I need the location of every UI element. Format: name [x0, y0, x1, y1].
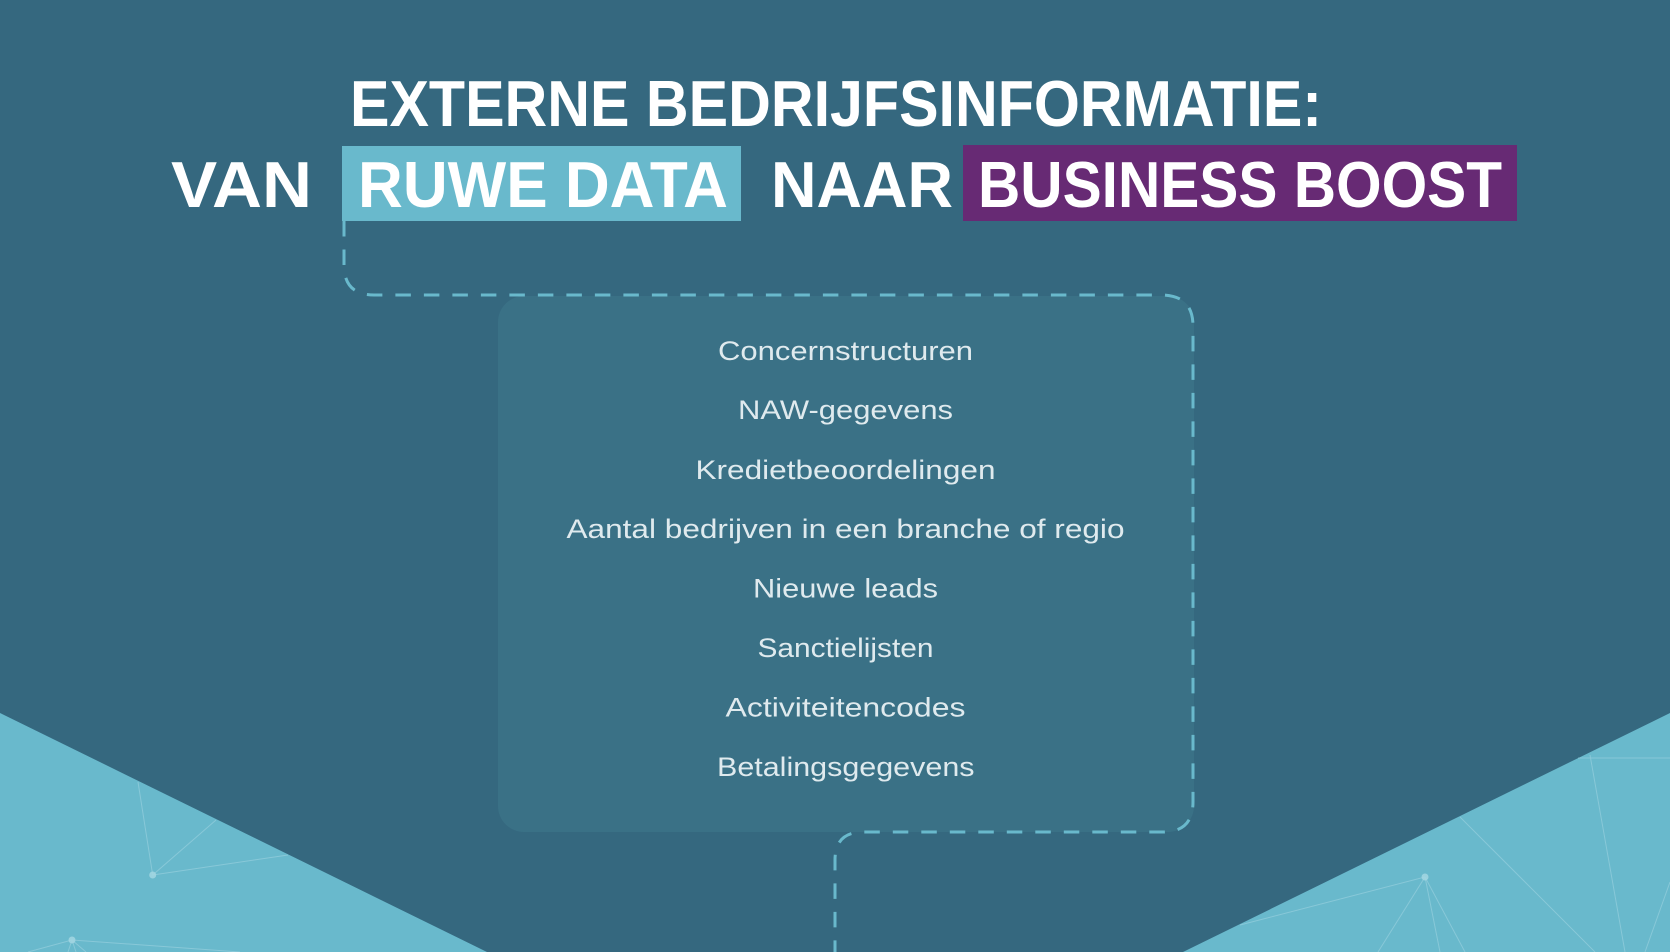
right corner triangle with network pattern: [1183, 713, 1670, 952]
panel: data types list: [498, 296, 1194, 832]
list item: Concernstructuren: [718, 336, 973, 366]
title line 1: EXTERNE BEDRIJFSINFORMATIE:: [350, 67, 1322, 140]
word: VAN: VAN: [171, 148, 312, 221]
panel background: [498, 296, 1194, 832]
list item: Betalingsgegevens: [717, 752, 974, 782]
list item: NAW-gegevens: [738, 395, 953, 425]
highlight: business boost: BUSINESS BOOST: [978, 148, 1502, 221]
list item: Sanctielijsten: [758, 633, 934, 663]
list item: Activiteitencodes: [726, 692, 966, 722]
list item: Aantal bedrijven in een branche of regio: [566, 514, 1124, 544]
list item: Nieuwe leads: [753, 574, 938, 604]
dashed connector path: [344, 221, 1193, 952]
word: NAAR: NAAR: [771, 148, 953, 221]
highlight: ruwe data: RUWE DATA: [358, 148, 728, 221]
left corner triangle with network pattern: [0, 713, 487, 952]
list item: Kredietbeoordelingen: [696, 455, 996, 485]
title: [171, 67, 1517, 221]
